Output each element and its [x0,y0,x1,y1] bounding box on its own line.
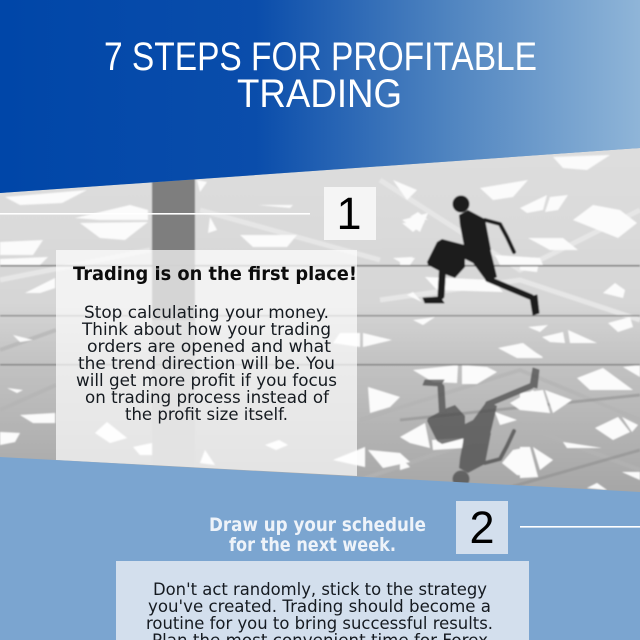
photo: runner over glass lattice [0,140,640,500]
step 1 body text: the profit size itself. [125,405,288,425]
step 1 body text [76,303,337,425]
title [104,35,537,116]
step 2 connector line [520,526,640,528]
step 2 number box [456,501,508,554]
step 2 body text: Don't act randomly, stick to the strategy [153,580,487,600]
header band [0,0,640,193]
runner reflection [423,368,539,488]
title: 7 STEPS FOR PROFITABLE [104,35,537,79]
panel: step 1 text [56,250,357,476]
step 1 number box: 1 [336,188,362,239]
step 1 body text: Think about how your trading [81,320,331,340]
step 1 heading: Trading is on the first place! [73,263,357,285]
step 2 body text: routine for you to bring successful results. [146,614,493,634]
horizontal floor lines [0,265,640,266]
glass panes [0,155,640,490]
step 2 heading: Draw up your schedule [209,514,426,536]
step 2 heading: for the next week. [229,534,396,556]
step 1 connector line [0,213,310,215]
panel: step 2 text [116,561,529,640]
step 2 body text [146,580,493,640]
step 1 body text: the trend direction will be. You [78,354,335,374]
step 2 body text: you've created. Trading should become a [148,597,491,617]
step 1 body text: Stop calculating your money. [84,303,329,323]
step 1 body text: will get more profit if you focus [76,371,337,391]
step 1 body text: on trading process instead of [85,388,330,408]
step 2 number box: 2 [469,502,495,553]
beams [0,180,640,320]
runner [423,196,539,315]
pillar [152,170,195,320]
step 1 number box [324,187,376,240]
step 2 heading [209,514,426,556]
title: TRADING [237,72,402,116]
step 1 body text: orders are opened and what [87,337,331,357]
